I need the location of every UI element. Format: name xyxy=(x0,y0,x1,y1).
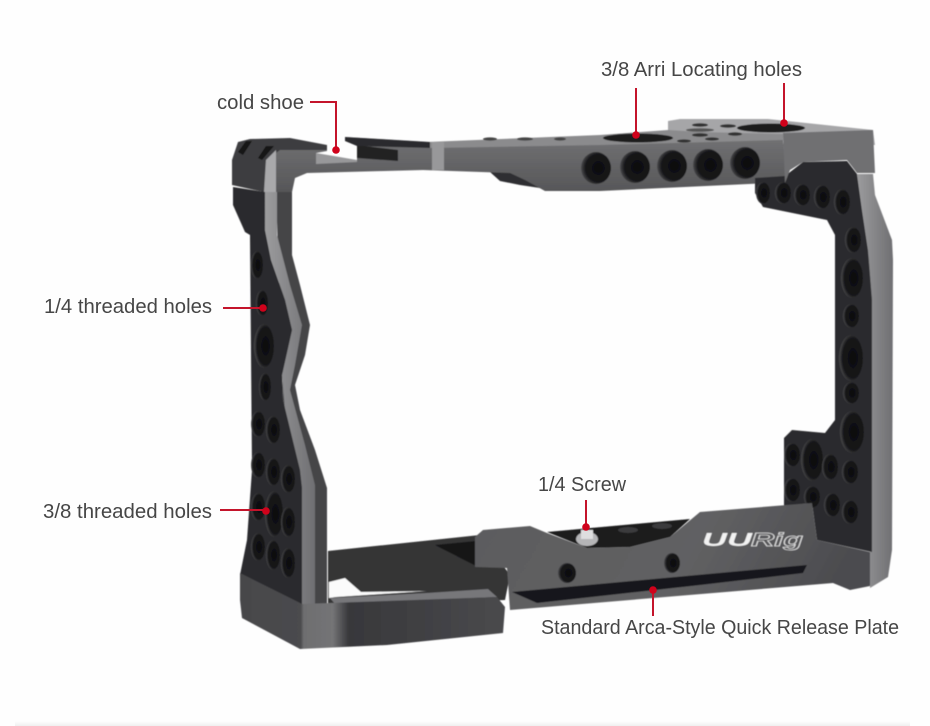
right column front plate xyxy=(755,161,872,552)
Arri holes on top surface xyxy=(483,123,805,143)
top corner block xyxy=(232,138,327,192)
arca rail slot xyxy=(512,565,807,603)
label: 3/8 Arri locating holes: 3/8 Arri Locating holes xyxy=(601,59,802,81)
label: 3/8 threaded holes: 3/8 threaded holes xyxy=(43,501,212,523)
right column side strip xyxy=(857,174,893,588)
left column holes xyxy=(251,251,295,578)
left column side band xyxy=(276,192,327,606)
rear ridge below bar xyxy=(490,170,540,188)
window rim xyxy=(330,589,497,604)
bottom rail xyxy=(475,503,870,610)
top bar threaded holes xyxy=(581,147,760,184)
bottom shadow band xyxy=(15,721,910,726)
rail mounting holes xyxy=(558,553,680,583)
label: 1/4 screw xyxy=(538,474,627,531)
quarter-inch screw xyxy=(576,530,598,546)
top bar upper surface xyxy=(345,130,783,150)
camera cage product illustration xyxy=(232,119,893,649)
rear top plate xyxy=(668,119,875,145)
left-top thin arm and top bar front face xyxy=(262,140,787,192)
UURig logo: Rig xyxy=(751,530,803,550)
label: 1/4 screw: 1/4 Screw xyxy=(538,474,627,496)
bottom foot xyxy=(240,573,505,649)
label: 1/4 threaded holes: 1/4 threaded holes xyxy=(44,296,212,318)
UURig logo: UU xyxy=(702,530,754,550)
left column front plate xyxy=(233,187,302,606)
bottom window frame xyxy=(328,535,510,606)
cold shoe slot and plate xyxy=(316,137,444,170)
label: 3/8 Arri locating holes xyxy=(601,59,802,139)
rail top recess with holes xyxy=(547,519,690,548)
right top block xyxy=(783,130,875,183)
label: cold shoe: cold shoe xyxy=(217,92,304,114)
label: standard Arca-style quick release plate: Standard Arca-Style Quick Release Plate xyxy=(541,617,899,639)
label: cold shoe xyxy=(217,92,340,154)
left column lit strip xyxy=(265,192,315,606)
right column holes xyxy=(756,182,864,524)
label: standard Arca-style quick release plate xyxy=(541,586,899,639)
UURig logo xyxy=(702,530,803,550)
window upper dark slot xyxy=(435,541,476,566)
see-through window gap xyxy=(329,578,427,598)
